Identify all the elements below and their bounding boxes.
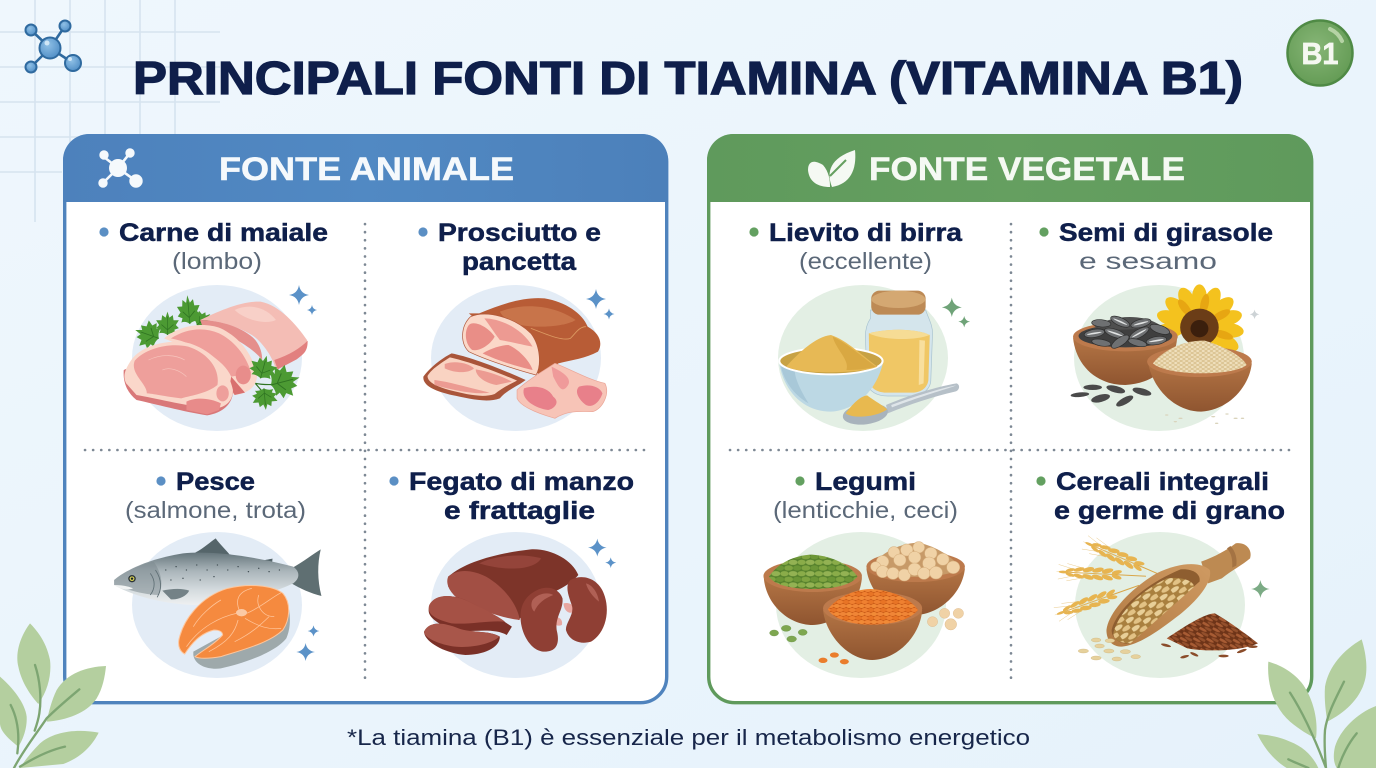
item: lievito di birra: (eccellente) bbox=[799, 248, 932, 274]
panel header: vegetale bbox=[707, 134, 1313, 202]
panel header: animale bbox=[63, 134, 668, 202]
item: pesce: (salmone, trota) bbox=[125, 497, 306, 523]
item: pesce bbox=[114, 468, 321, 678]
sparkles bbox=[586, 289, 614, 320]
badge: B1 bbox=[1288, 20, 1352, 86]
illustration: pork loin bbox=[124, 294, 308, 415]
sparkles bbox=[289, 285, 317, 315]
item: semi di girasole: e sesamo bbox=[1079, 248, 1217, 274]
item: carne di maiale: (lombo) bbox=[172, 248, 262, 274]
item: fegato di manzo: e frattaglie bbox=[444, 497, 595, 525]
item: prosciutto e pancetta: pancetta bbox=[462, 248, 577, 276]
item: fegato di manzo bbox=[389, 468, 634, 678]
icon: molecule white bbox=[99, 149, 142, 187]
panel: fonte animale bbox=[63, 134, 668, 703]
illustration: legumes bbox=[763, 542, 965, 664]
badge: B1: B1 bbox=[1302, 36, 1338, 71]
item: legumi: Legumi bbox=[815, 468, 916, 496]
decoration: leaves bottom left bbox=[0, 623, 106, 768]
item: carne di maiale: Carne di maiale bbox=[119, 219, 328, 247]
illustration: yeast bbox=[779, 291, 970, 427]
icon: molecule bbox=[26, 20, 81, 72]
heading: fonte animale: FONTE ANIMALE bbox=[219, 151, 514, 187]
illustration: seeds bbox=[1070, 284, 1259, 424]
item: legumi bbox=[763, 468, 965, 678]
item: legumi: (lenticchie, ceci) bbox=[773, 497, 958, 523]
item: lievito di birra bbox=[749, 219, 970, 431]
item: prosciutto e pancetta bbox=[418, 219, 614, 431]
panel: fonte vegetale bbox=[707, 134, 1313, 703]
icon: leaves white bbox=[808, 150, 855, 187]
item: prosciutto e pancetta: Prosciutto e bbox=[438, 219, 601, 247]
heading: fonte vegetale: FONTE VEGETALE bbox=[869, 151, 1185, 187]
item: cereali integrali: Cereali integrali bbox=[1056, 468, 1269, 496]
item: semi di girasole bbox=[1039, 219, 1273, 431]
illustration: salmon bbox=[114, 538, 321, 669]
item: cereali integrali: e germe di grano bbox=[1054, 497, 1285, 525]
item: fegato di manzo: Fegato di manzo bbox=[409, 468, 634, 496]
item: pesce: Pesce bbox=[176, 468, 255, 496]
illustration: ham bbox=[423, 298, 607, 418]
footnote: *La tiamina (B1) è essenziale per il metabolismo energetico bbox=[347, 725, 1030, 750]
item: semi di girasole: Semi di girasole bbox=[1059, 219, 1273, 247]
item: cereali integrali bbox=[1036, 468, 1285, 678]
illustration: liver and kidneys bbox=[424, 539, 616, 655]
illustration: grains and scoop bbox=[1052, 534, 1270, 661]
item: lievito di birra: Lievito di birra bbox=[769, 219, 963, 247]
decoration: leaves bottom right bbox=[1257, 639, 1376, 768]
title: PRINCIPALI FONTI DI TIAMINA (VITAMINA B1) bbox=[133, 52, 1243, 104]
item: carne di maiale bbox=[99, 219, 328, 431]
